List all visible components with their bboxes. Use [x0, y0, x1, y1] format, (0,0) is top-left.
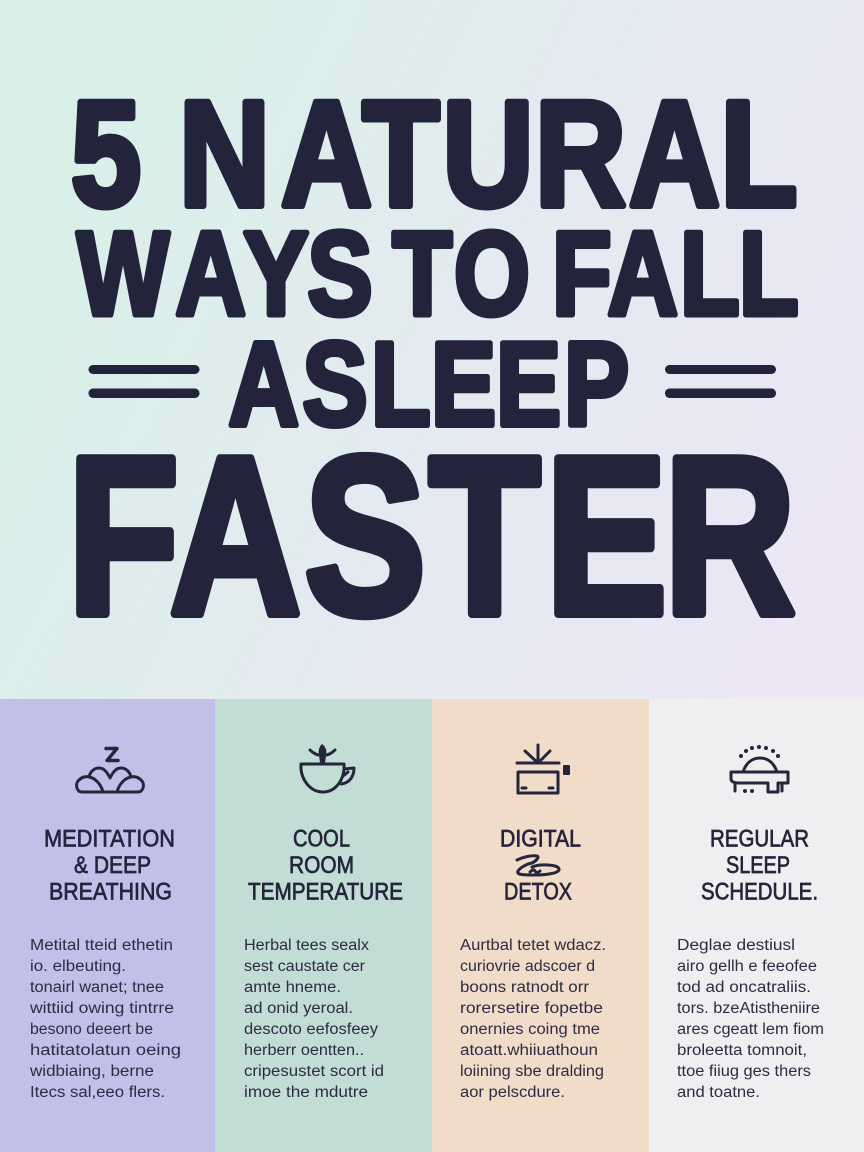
left ornament lines — [88, 365, 200, 398]
body text: rorersetire fopetbe — [460, 1000, 603, 1017]
body text: wittiid owing tintrre — [29, 1000, 174, 1017]
body text: broleetta tomnoit, — [677, 1042, 807, 1059]
body text: airo gellh e feeofee — [677, 958, 817, 975]
icon: lotus with z — [77, 748, 143, 792]
body text: besono deeert be — [30, 1021, 153, 1038]
panel: digital detox — [432, 699, 649, 1152]
icon: squiggle between heading lines — [517, 856, 559, 875]
title: FASTER — [68, 411, 796, 662]
body text: atoatt.whiiuathoun — [460, 1042, 598, 1059]
heading: DETOX — [504, 878, 572, 906]
body text — [244, 937, 384, 1101]
body text: loiining sbe dralding — [460, 1063, 604, 1080]
heading: BREATHING — [49, 878, 172, 906]
body text: cripesustet scort id — [244, 1063, 384, 1080]
body text: Metital tteid ethetin — [30, 937, 173, 954]
body text: io. elbeuting. — [30, 958, 126, 975]
panel: meditation and deep breathing — [0, 699, 215, 1152]
icon: cup with leaf — [301, 744, 354, 792]
body text — [460, 937, 606, 1101]
heading: SLEEP — [726, 852, 790, 879]
right ornament lines — [665, 365, 776, 398]
heading — [44, 826, 175, 906]
body text: hatitatolatun oeing — [30, 1042, 181, 1059]
heading: SCHEDULE. — [701, 878, 818, 906]
body text: sest caustate cer — [244, 958, 365, 975]
body text: amte hneme. — [244, 979, 341, 996]
body text: widbiaing, berne — [29, 1063, 154, 1080]
panel: regular sleep schedule — [649, 699, 864, 1152]
body text: onernies coing tme — [460, 1021, 600, 1038]
heading: TEMPERATURE — [248, 878, 403, 906]
body text: tod ad oncatraliis. — [677, 979, 811, 996]
panel: cool room temperature — [215, 699, 432, 1152]
body text: descoto eefosfeey — [244, 1021, 378, 1038]
body text: Aurtbal tetet wdacz. — [460, 937, 606, 954]
body text: Herbal tees sealx — [244, 937, 369, 954]
heading: ROOM — [289, 852, 354, 879]
body text: boons ratnodt orr — [460, 979, 589, 996]
heading — [248, 826, 403, 906]
heading: COOL — [293, 826, 350, 852]
body text: imoe the mdutre — [244, 1084, 368, 1101]
heading: REGULAR — [710, 826, 809, 852]
body text: Deglae destiusl — [677, 937, 795, 954]
body text: ttoe fiiug ges thers — [677, 1063, 811, 1080]
heading — [500, 826, 581, 906]
body text: tors. bzeAtistheniire — [677, 1000, 820, 1017]
body text: tonairl wanet; tnee — [30, 979, 164, 996]
body text: ad onid yeroal. — [244, 1000, 353, 1017]
icon: bed with sunrise — [731, 745, 788, 793]
title: 5 NATURAL — [71, 71, 797, 238]
heading — [701, 826, 818, 906]
body text: and toatne. — [677, 1084, 760, 1101]
body text — [29, 937, 181, 1101]
body text: herberr oentten.. — [244, 1042, 364, 1059]
icon: device with burst — [517, 745, 570, 793]
body text — [677, 937, 824, 1101]
title: ASLEEP — [229, 318, 629, 451]
body text: Itecs sal,eeo flers. — [30, 1084, 165, 1101]
heading: DIGITAL — [500, 826, 581, 852]
heading: & DEEP — [74, 852, 151, 879]
heading: MEDITATION — [44, 826, 175, 852]
title: WAYS TO FALL — [77, 208, 799, 341]
body text: aor pelscdure. — [460, 1084, 565, 1101]
body text: curiovrie adscoer d — [460, 958, 595, 975]
title — [68, 71, 799, 662]
body text: ares cgeatt lem fiom — [677, 1021, 824, 1038]
header background — [0, 0, 864, 699]
